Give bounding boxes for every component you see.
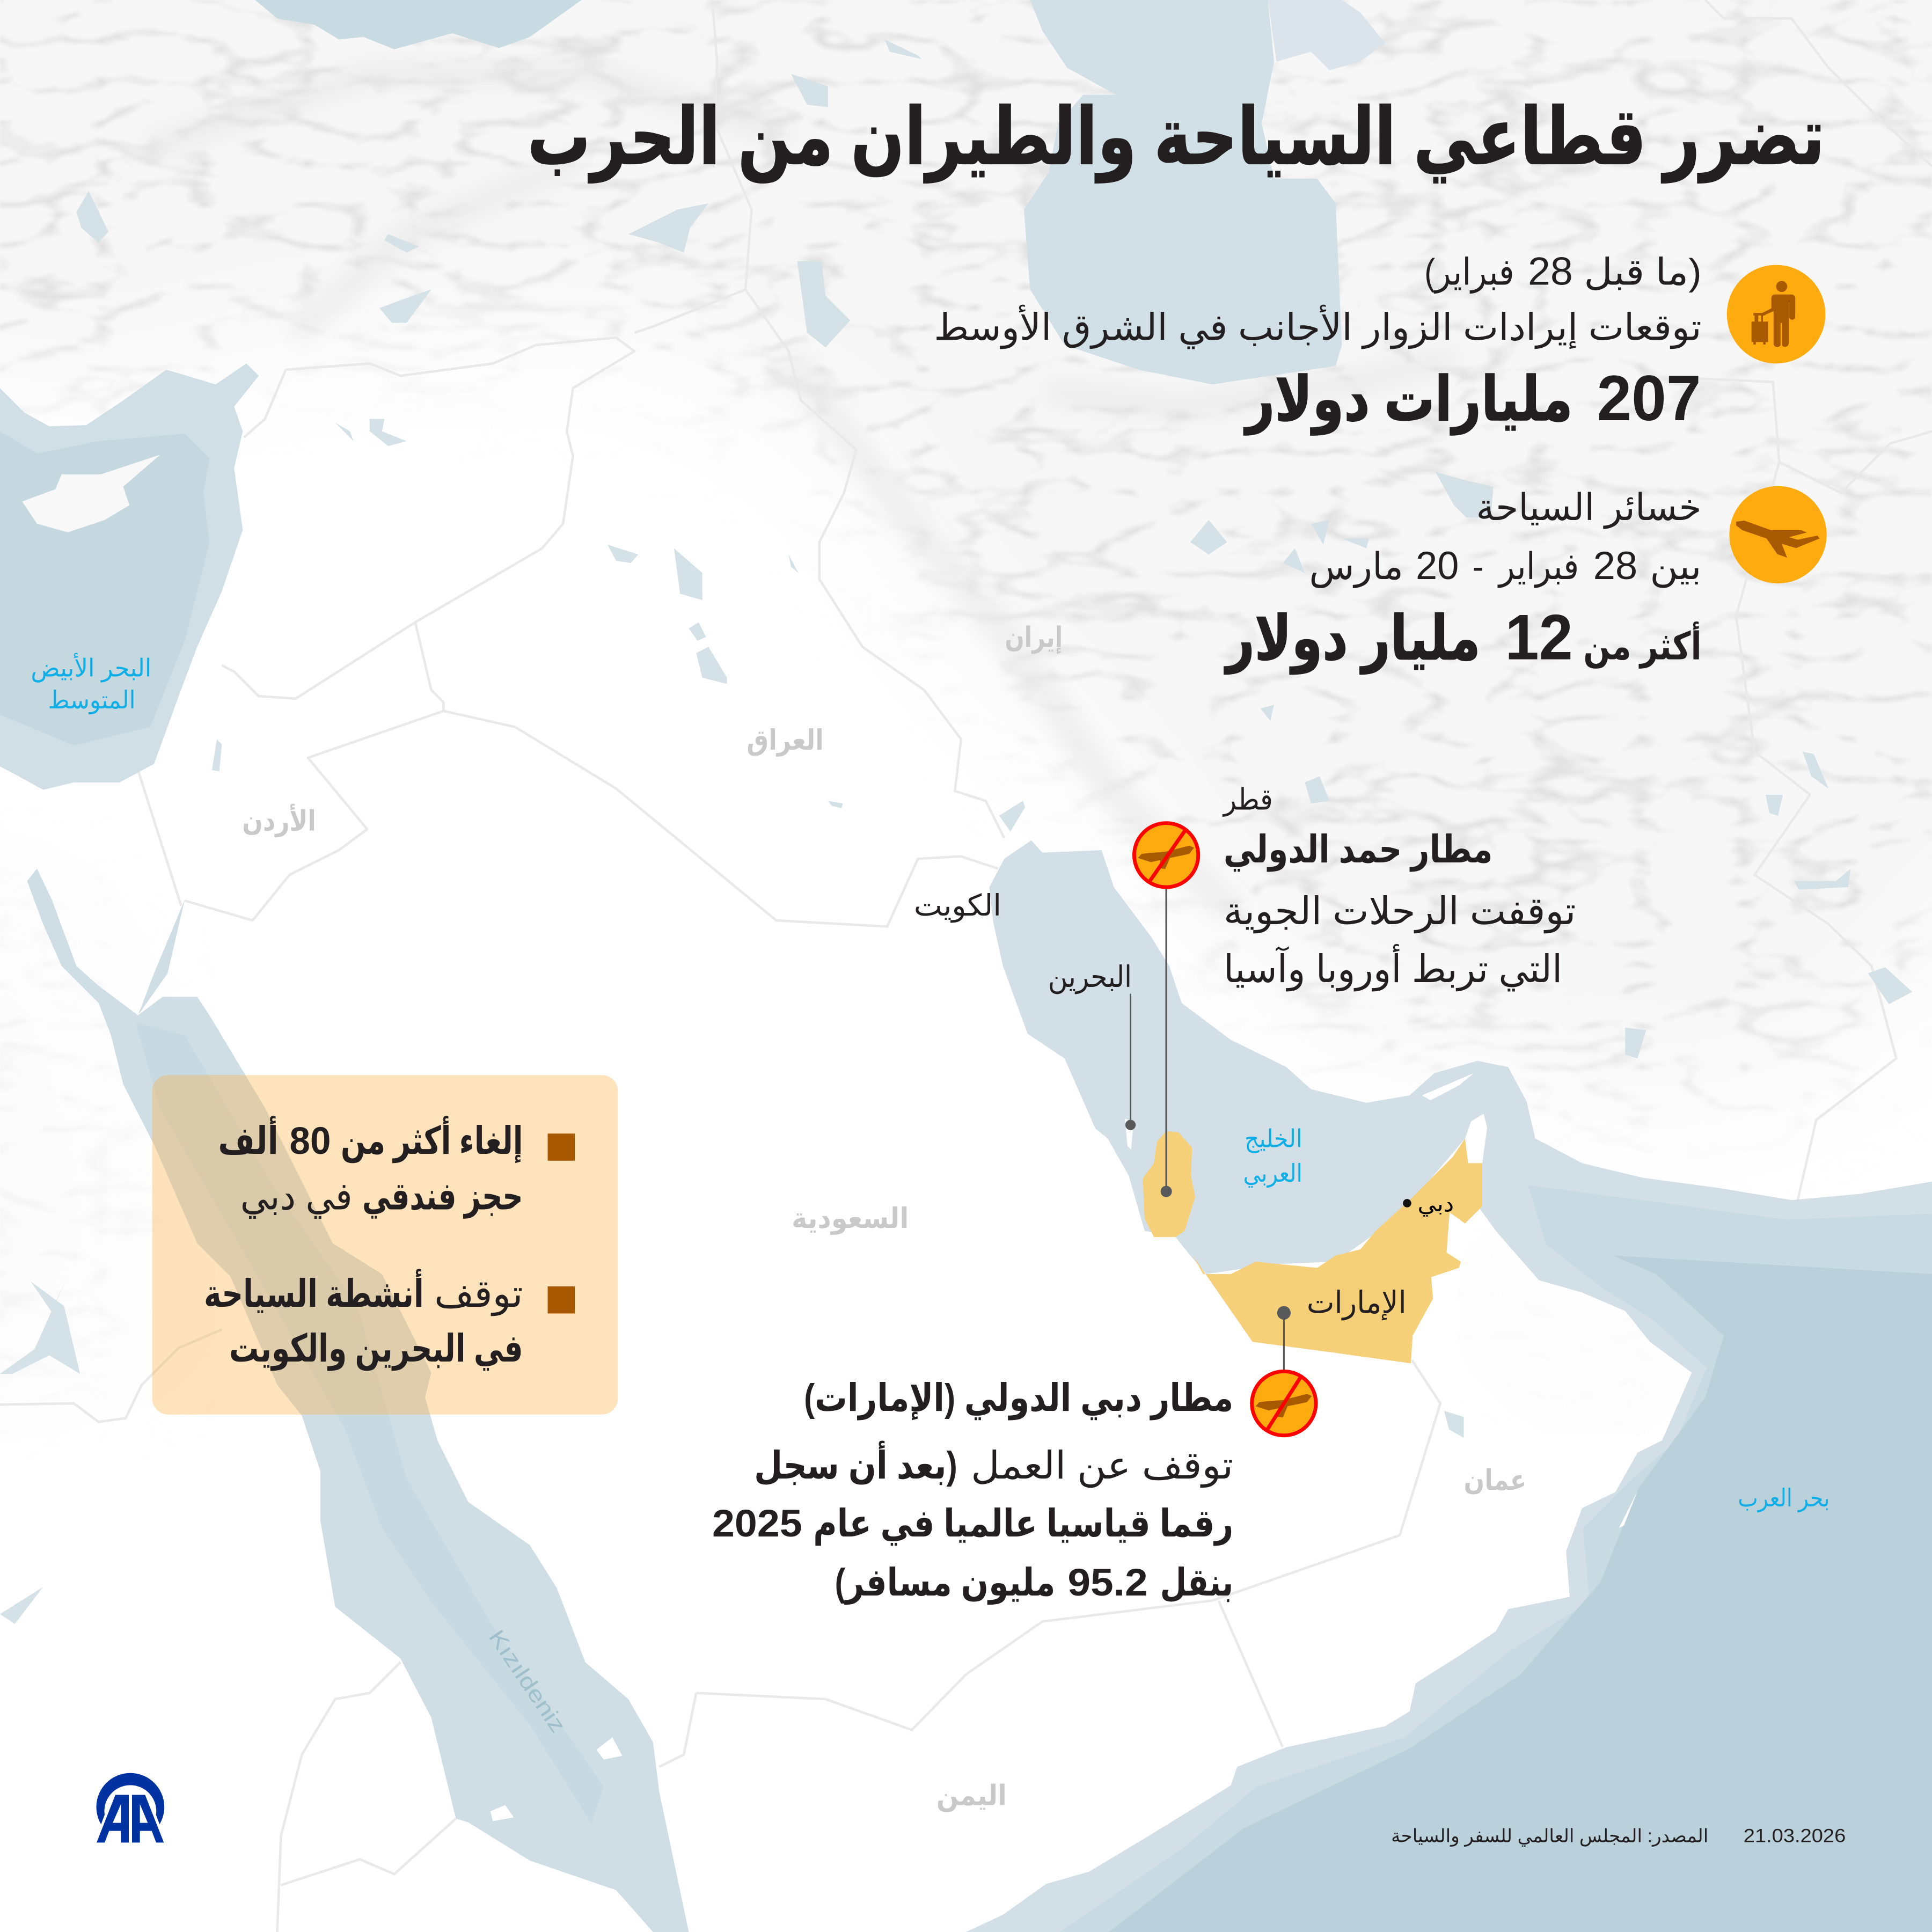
country label: Yemen: اليمن	[936, 1780, 1007, 1812]
bullet: hotel cancellations: إلغاء أكثر من	[341, 1116, 523, 1163]
sea label: Arabian Gulf: العربي	[1243, 1159, 1302, 1188]
map label and leader: Bahrain	[1048, 960, 1136, 1130]
bullet: hotel cancellations	[218, 1116, 575, 1219]
bullet: tourism activities halted: توقف	[434, 1273, 523, 1316]
sea: Red Sea	[27, 869, 689, 1932]
text: date range: 28	[1593, 543, 1637, 588]
panel: Gulf tourism impacts	[152, 1075, 618, 1415]
sea label: Arabian Gulf: الخليج	[1245, 1124, 1302, 1153]
callout: Hamad International Airport	[1134, 782, 1576, 1197]
bullet: hotel cancellations: حجز فندقي	[362, 1175, 523, 1219]
sea label: Arabian Gulf	[1243, 1125, 1302, 1188]
icon: no flights	[1252, 1371, 1316, 1436]
bullet: hotel cancellations: ألف	[218, 1116, 279, 1162]
sea label: Mediterranean: المتوسط	[48, 686, 136, 715]
callout: Dubai International Airport	[712, 1306, 1316, 1605]
country label: Iraq: العراق	[747, 724, 824, 757]
map label and dot: Dubai: دبي	[1417, 1191, 1454, 1217]
text: before 28 February: (ما قبل	[1584, 251, 1702, 292]
stat value: 207 billion dollars: مليارات دولار	[1243, 365, 1573, 436]
text: stopped operating: توقف عن العمل	[971, 1445, 1233, 1488]
logo: Anadolu Agency	[96, 1773, 164, 1842]
bullet: tourism activities halted	[204, 1269, 575, 1371]
bullet: tourism activities halted: في البحرين والكويت	[229, 1328, 523, 1371]
text: date range: بين	[1650, 546, 1702, 588]
text: global record in 2025: رقما قياسيا عالميا في عام	[813, 1503, 1233, 1546]
leader line and dot: Qatar	[1161, 887, 1172, 1197]
icon: traveller with suitcase	[1727, 265, 1825, 363]
sea label: Arabian Sea: بحر العرب	[1738, 1484, 1829, 1513]
text: before 28 February	[1424, 248, 1702, 294]
map label and leader: Bahrain: البحرين	[1048, 960, 1132, 994]
sea label: Red Sea: Kızıldeniz	[484, 1625, 570, 1737]
icon: plane	[1729, 486, 1827, 583]
text: 95.2 million passengers: مليون مسافر)	[835, 1562, 1055, 1605]
text: global record in 2025	[712, 1503, 1233, 1546]
text: before 28 February: فبراير)	[1424, 251, 1514, 294]
map label and dot: Dubai	[1403, 1191, 1454, 1217]
text: date range: فبراير	[1497, 546, 1579, 588]
text: Qatar: قطر	[1222, 782, 1273, 816]
bullet: tourism activities halted: أنشطة السياحة	[204, 1269, 424, 1315]
country label: Saudi Arabia: السعودية	[792, 1203, 909, 1235]
text: flights halted: توقفت الرحلات الجوية	[1224, 890, 1576, 934]
leader line and dot: UAE	[1277, 1306, 1291, 1370]
country label: Jordan: الأردن	[242, 803, 316, 837]
map: white islands in the gulf	[491, 1073, 1637, 1821]
sea: Arabian Gulf and Arabian Sea	[966, 840, 1932, 1932]
text: date range	[1309, 543, 1702, 588]
text: global record in 2025: 2025	[712, 1503, 802, 1545]
text: 95.2 million passengers	[835, 1562, 1233, 1605]
date: 21.03.2026	[1744, 1825, 1846, 1846]
sea: Mediterranean	[0, 363, 259, 790]
stat value: more than 12 billion dollars: مليار دولار	[1224, 604, 1481, 675]
text: foreign visitor revenue forecast: توقعات إيرادات الزوار الأجانب في الشرق الأوسط	[934, 305, 1702, 349]
text: airport name: مطار حمد الدولي	[1224, 829, 1493, 872]
text: 95.2 million passengers: بنقل	[1160, 1562, 1233, 1604]
text: before 28 February: 28	[1528, 248, 1573, 293]
stat block: visitor revenue forecast	[934, 248, 1825, 436]
text: Europe and Asia link: التي تربط أوروبا وآسيا	[1224, 944, 1562, 992]
map label: UAE: الإمارات	[1307, 1285, 1407, 1321]
icon: no flights	[1134, 823, 1198, 887]
text: stopped operating: (بعد أن سجل	[754, 1440, 957, 1487]
map: highlighted Qatar	[1143, 1131, 1195, 1237]
text: stopped operating	[754, 1440, 1233, 1488]
text: date range: مارس	[1309, 546, 1403, 588]
text: airport name: مطار دبي الدولي (الإمارات)	[804, 1377, 1233, 1421]
stat value: more than 12 billion dollars: 12	[1505, 602, 1573, 673]
sea label: Mediterranean	[31, 652, 151, 715]
sea: Black Sea	[255, 0, 582, 49]
text: date range: 20	[1416, 543, 1459, 588]
stat block: tourism losses	[1224, 486, 1827, 675]
stat value: more than 12 billion dollars: أكثر من	[1583, 621, 1702, 668]
text: 95.2 million passengers: 95.2	[1067, 1562, 1148, 1604]
stat value: 207 billion dollars: 207	[1597, 363, 1701, 434]
source note: المصدر: المجلس العالمي للسفر والسياحة	[1391, 1826, 1708, 1847]
sea label: Mediterranean: البحر الأبيض	[31, 652, 151, 683]
map: highlighted UAE	[1192, 1138, 1482, 1363]
bullet: hotel cancellations: في دبي	[240, 1175, 353, 1219]
country label: Iran: إيران	[1005, 621, 1063, 654]
text: tourism losses: خسائر السياحة	[1476, 487, 1702, 529]
text: date range: -	[1473, 546, 1483, 587]
map label: Kuwait: الكويت	[914, 889, 1001, 923]
bullet: hotel cancellations: 80	[290, 1120, 331, 1162]
country label: Oman: عمان	[1464, 1465, 1527, 1496]
stat value: more than 12 billion dollars	[1224, 602, 1702, 675]
sea: Caspian	[1024, 0, 1385, 384]
